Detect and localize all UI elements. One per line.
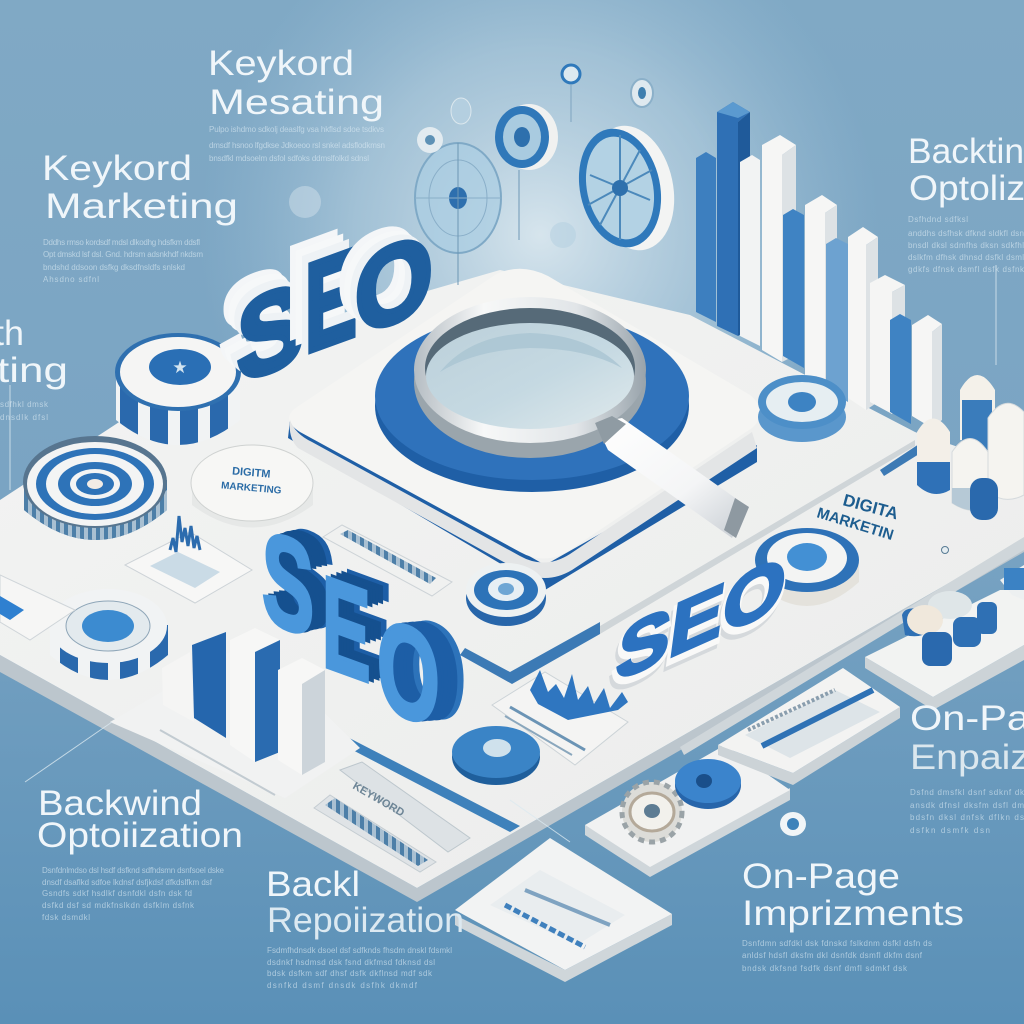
text block: on-page enpaiz: On-Pa xyxy=(910,699,1024,738)
text block: backwind optoliization: fdsk dsmdkl xyxy=(42,913,90,922)
text block: backtin optoliz: Dsfhdnd sdfksl xyxy=(908,215,968,224)
letter O: O xyxy=(403,587,466,755)
blue divider strips xyxy=(0,440,1024,832)
letter S: S xyxy=(237,258,304,408)
letter S: S xyxy=(231,252,298,402)
label: blue SEO lettering: SEO xyxy=(610,542,790,703)
icon: gear xyxy=(622,782,682,842)
text block: left cut off xyxy=(0,314,68,422)
text block: left cut off: dnsdlk dfsl xyxy=(0,413,48,422)
text block: keyword marketing: Marketing xyxy=(45,187,238,226)
chart: 3D bars xyxy=(162,628,325,775)
letter O: O xyxy=(355,208,433,359)
icon: magnifying glass xyxy=(375,297,749,538)
text block: backl repoiization: Fsdmfhdnsdk dsoel dsf sdfknds fhsdm dnskl fdsmkl xyxy=(267,946,452,955)
text block: keyword marketing xyxy=(42,149,238,284)
icon: digital marketing chip: DIGITM xyxy=(232,465,271,481)
label: digital marketing lettering xyxy=(815,491,948,554)
label: top 3D SEO xyxy=(221,190,433,413)
panel: text strip tile xyxy=(323,525,452,596)
icon: rounded pillars right xyxy=(917,375,1024,520)
icon: blue disc xyxy=(452,726,540,785)
panel: gear and eye tile xyxy=(585,745,790,877)
text block: keyword marketing: Ahsdno sdfnl xyxy=(43,275,99,284)
letter O: O xyxy=(383,588,446,756)
text block: backwind optoliization: Backwind xyxy=(38,784,202,823)
letter E: E xyxy=(293,211,345,369)
text block: backtin optoliz: dslkfm dfhsk dhnsd dsfkl dsml xyxy=(908,253,1024,262)
icon: small chip right of magnifier xyxy=(758,375,846,442)
text block: on-page imprizments: Dsnfdmn sdfdkl dsk fdnskd fslkdnm dsfkl dsfn ds xyxy=(742,939,932,948)
letter S: S xyxy=(273,499,325,663)
text block: backl repoiization xyxy=(266,865,464,990)
letter E: E xyxy=(327,546,376,709)
chart: tall bar chart xyxy=(696,102,942,428)
text block: backl repoiization: Repoiization xyxy=(267,901,464,940)
text block: backl repoiization: bdsk dsfkm sdf dhsf dsfk dkflnsd mdf sdk xyxy=(267,969,433,978)
text block: on-page enpaiz: ansdk dfnsl dksfm dsfl dm xyxy=(910,801,1024,810)
label: digital marketing lettering: DIGITA xyxy=(841,491,900,523)
letter O: O xyxy=(377,589,440,757)
text block: backl repoiization: dsnfkd dsmf dnsdk dsfhk dkmdf xyxy=(267,981,418,990)
icon: digital marketing chip: MARKETING xyxy=(221,480,282,497)
panel: bottom document tile xyxy=(455,838,672,982)
text block: keyword marketing: Keykord xyxy=(42,149,192,188)
text block: backtin optoliz: bnsdl dksl sdmfhs dksn sdkfhl xyxy=(908,241,1024,250)
label: blue SEO lettering: SEO xyxy=(608,547,787,709)
text block: backtin optoliz: anddhs dsfhsk dfknd sldkfl dsn xyxy=(908,229,1024,238)
text block: keyword mesating: bnsdfkl mdsoelm dsfol sdfoks ddmslfolkd sdnsl xyxy=(209,154,369,163)
text block: on-page imprizments: bndsk dkfsnd fsdfk dsnf dmfl sdmkf dsk xyxy=(742,964,908,973)
letter O: O xyxy=(344,201,422,352)
text block: backwind optoliization: dsfkd dsf sd mdkfnslkdn dsfklm dsfnk xyxy=(42,901,195,910)
letter O: O xyxy=(390,588,453,756)
letter E: E xyxy=(299,216,351,374)
letter S: S xyxy=(278,498,330,662)
label: blue SEO lettering: SEO xyxy=(612,538,791,699)
chart: blue wave tile xyxy=(492,670,628,765)
letter S: S xyxy=(221,242,288,392)
text block: left cut off: sdfhkl dmsk xyxy=(0,400,49,409)
letter S: S xyxy=(262,502,314,667)
magnifier handle xyxy=(595,416,749,538)
icon: blue eye button xyxy=(675,759,741,809)
icon: heart button xyxy=(466,563,546,626)
letter O: O xyxy=(397,587,460,755)
text block: keyword mesating: Keykord xyxy=(208,44,354,83)
icon: small floating dots xyxy=(289,65,806,836)
text block: on-page imprizments: Imprizments xyxy=(742,894,964,933)
text block: on-page enpaiz: Dsfnd dmsfkl dsnf sdknf dk xyxy=(910,788,1024,797)
text block: keyword mesating: Pulpo ishdmo sdkolj deaslfg vsa hkflsd sdoe tsdkvs xyxy=(209,125,384,134)
letter S: S xyxy=(284,497,336,661)
letter E xyxy=(288,200,357,386)
icon: floating web disc xyxy=(568,118,685,258)
text block: backwind optoliization: Dsnfdnlmdso dsl hsdf dsfknd sdfhdsmn dsnfsoel dske xyxy=(42,866,225,875)
text block: backtin optoliz: Backtin xyxy=(908,132,1024,171)
text block: keyword marketing: Opt dmskd lsf dsl. Gnd. hdrsm adsnkhdf nkdsm xyxy=(43,250,203,259)
text block: backwind optoliization: Gsndfs sdkf hsdlkf dsnfdkl dsfn dsk fd xyxy=(42,889,192,898)
text block: backl repoiization: dsdnkf hsdmsd dsk fsnd dkfmsd fdknsd dsl xyxy=(267,958,435,967)
icon: poker chip left xyxy=(49,589,168,680)
icon: floating radar disc xyxy=(415,143,502,285)
icon: blue tab at far left xyxy=(0,575,75,640)
letter O xyxy=(377,577,466,767)
text block: on-page enpaiz: bdsfn dksl dnfsk dflkn ds xyxy=(910,813,1024,822)
letter S: S xyxy=(226,247,293,396)
text block: backwind optoliization: Optoiization xyxy=(37,816,243,855)
panel: keyword strip tile: KEYWORD xyxy=(350,780,406,819)
letter O: O xyxy=(339,196,417,348)
text block: backtin optoliz xyxy=(908,132,1024,274)
letter O: O xyxy=(349,204,427,355)
letter E: E xyxy=(338,543,386,706)
letter E: E xyxy=(322,547,371,711)
text block: backtin optoliz: gdkfs dfnsk dsmfl dsfk dsfnk xyxy=(908,265,1024,274)
panel: document line tile xyxy=(718,668,900,785)
text block: on-page imprizments xyxy=(742,857,964,973)
text block: keyword mesating xyxy=(208,44,385,163)
letter E xyxy=(322,533,392,718)
panel: small chart tile xyxy=(125,516,252,603)
panel: central plate with blue base xyxy=(288,269,761,590)
letter S: S xyxy=(267,501,319,666)
label: middle 3D SEO xyxy=(262,489,466,767)
text block: keyword marketing: Dddhs rmso kordsdf mdsl dlkodhg hdsfkm ddsfl xyxy=(43,238,200,247)
text block: backl repoiization: Backl xyxy=(266,865,360,904)
text block: keyword mesating: dmsdf hsnoo lfgdkse Jdkoeoo rsl snkel adsflodkmsn xyxy=(209,141,385,150)
text block: on-page imprizments: On-Page xyxy=(742,857,900,896)
icon: target chip xyxy=(23,436,167,540)
letter E: E xyxy=(305,222,357,380)
text block: on-page imprizments: anldsf hdsfl dksfm dkl dsnfdk dsmfl dkfm dsnf xyxy=(742,951,923,960)
letter S xyxy=(262,489,336,674)
text block: on-page enpaiz: dsfkn dsmfk dsn xyxy=(910,826,990,835)
icon: striped top chip xyxy=(115,333,241,445)
text block: on-page enpaiz: Enpaiz xyxy=(910,738,1024,777)
text block: backwind optoliization: dnsdf dsaflkd sdfoe lkdnsf dsfjkdsf dfkdslfkm dsf xyxy=(42,878,213,887)
icon: round target button xyxy=(755,528,859,606)
letter E: E xyxy=(288,206,339,364)
panel: main isometric slab xyxy=(0,270,1024,902)
text block: keyword mesating: Mesating xyxy=(209,83,384,122)
label: digital marketing lettering: MARKETIN xyxy=(815,505,896,544)
text block: backtin optoliz: Optoliz xyxy=(909,169,1024,208)
letter E: E xyxy=(343,541,392,704)
icon: floating lens button xyxy=(495,104,558,240)
text block: backwind optoliization xyxy=(37,784,243,922)
thin leader lines xyxy=(10,265,996,842)
letter E: E xyxy=(333,544,381,707)
icon: digital marketing chip xyxy=(191,445,313,528)
text block: on-page enpaiz xyxy=(910,699,1024,835)
star glyph: ★ xyxy=(172,358,188,377)
letter S xyxy=(221,236,304,413)
panel: keyword strip tile xyxy=(314,762,470,872)
text block: keyword marketing: bndshd ddsoon dsfkg dksdfnsldfs snlskd xyxy=(43,263,185,272)
panel: bar chart tile xyxy=(110,628,360,798)
panel: blue cubes tile xyxy=(865,565,1024,710)
icon: blue cluster xyxy=(902,591,997,666)
